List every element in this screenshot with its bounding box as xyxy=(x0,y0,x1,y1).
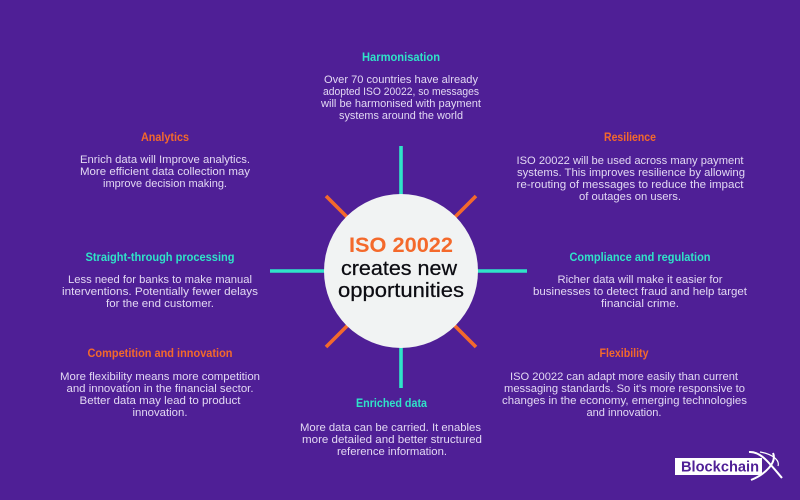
text: straight-through processing: Less need for banks to make manual xyxy=(68,274,252,286)
text: analytics: Enrich data will Improve analytics. xyxy=(80,154,250,166)
text: flexibility: and innovation. xyxy=(586,407,662,419)
panel: enriched data xyxy=(300,398,482,458)
text: compliance and regulation: Richer data will make it easier for xyxy=(558,274,723,286)
heading: resilience: Resilience xyxy=(604,132,656,144)
logo: Blockchain xyxy=(675,452,782,480)
text: resilience: systems. This improves resilience by allowing xyxy=(517,167,745,179)
panel: harmonisation xyxy=(320,52,481,122)
text: competition and innovation: innovation. xyxy=(132,407,188,419)
panel: analytics xyxy=(80,132,251,190)
panel: resilience xyxy=(516,132,745,203)
text: harmonisation xyxy=(320,74,481,122)
central subtitle: opportunities xyxy=(338,280,464,302)
text: resilience: of outages on users. xyxy=(579,191,681,203)
text: enriched data: More data can be carried. It enables xyxy=(300,422,482,434)
central title: ISO 20022 xyxy=(349,234,453,257)
text: harmonisation: Over 70 countries have already xyxy=(324,74,478,86)
heading: compliance and regulation: Compliance and regulation xyxy=(570,252,710,264)
text: straight-through processing: for the end customer. xyxy=(106,298,214,310)
text: competition and innovation: More flexibility means more competition xyxy=(60,371,260,383)
central subtitle: creates new xyxy=(341,258,458,280)
text: competition and innovation: and innovation in the financial sector. xyxy=(66,383,254,395)
text: analytics: improve decision making. xyxy=(103,178,227,190)
panel: straight-through processing xyxy=(62,252,259,310)
text: flexibility: ISO 20022 can adapt more easily than current xyxy=(510,371,738,383)
text: compliance and regulation xyxy=(533,274,747,310)
text: resilience xyxy=(516,155,745,203)
text: resilience: re-routing of messages to reduce the impact xyxy=(516,179,744,191)
text: competition and innovation: Better data may lead to product xyxy=(80,395,241,407)
text: straight-through processing xyxy=(62,274,259,310)
text: enriched data: reference information. xyxy=(337,446,447,458)
text: harmonisation: adopted ISO 20022, so messages xyxy=(323,86,479,98)
heading: flexibility: Flexibility xyxy=(600,348,649,360)
heading: harmonisation: Harmonisation xyxy=(362,52,440,64)
logo: Blockchain: Blockchain xyxy=(681,460,759,476)
text: analytics xyxy=(80,154,251,190)
panel: compliance and regulation xyxy=(533,252,747,310)
heading: straight-through processing: Straight-through processing xyxy=(86,252,234,264)
text: compliance and regulation: businesses to detect fraud and help target xyxy=(533,286,747,298)
text: compliance and regulation: financial crime. xyxy=(601,298,679,310)
text: enriched data xyxy=(300,422,482,458)
heading: competition and innovation: Competition and innovation xyxy=(88,348,232,360)
text: resilience: ISO 20022 will be used across many payment xyxy=(516,155,744,167)
text: harmonisation: will be harmonised with payment xyxy=(320,98,481,110)
panel: competition and innovation xyxy=(60,348,260,419)
central circle xyxy=(324,194,478,348)
text: straight-through processing: interventions. Potentially fewer delays xyxy=(62,286,259,298)
text: flexibility: messaging standards. So it's more responsive to xyxy=(504,383,745,395)
text: flexibility xyxy=(502,371,748,419)
panel: flexibility xyxy=(502,348,748,419)
text: analytics: More efficient data collection may xyxy=(80,166,251,178)
text: enriched data: more detailed and better structured xyxy=(302,434,482,446)
text: harmonisation: systems around the world xyxy=(339,110,463,122)
heading: enriched data: Enriched data xyxy=(356,398,428,410)
text: flexibility: changes in the economy, emerging technologies xyxy=(502,395,748,407)
radial spokes xyxy=(270,146,527,388)
text: competition and innovation xyxy=(60,371,260,419)
heading: analytics: Analytics xyxy=(141,132,189,144)
central subtitle xyxy=(338,258,464,302)
